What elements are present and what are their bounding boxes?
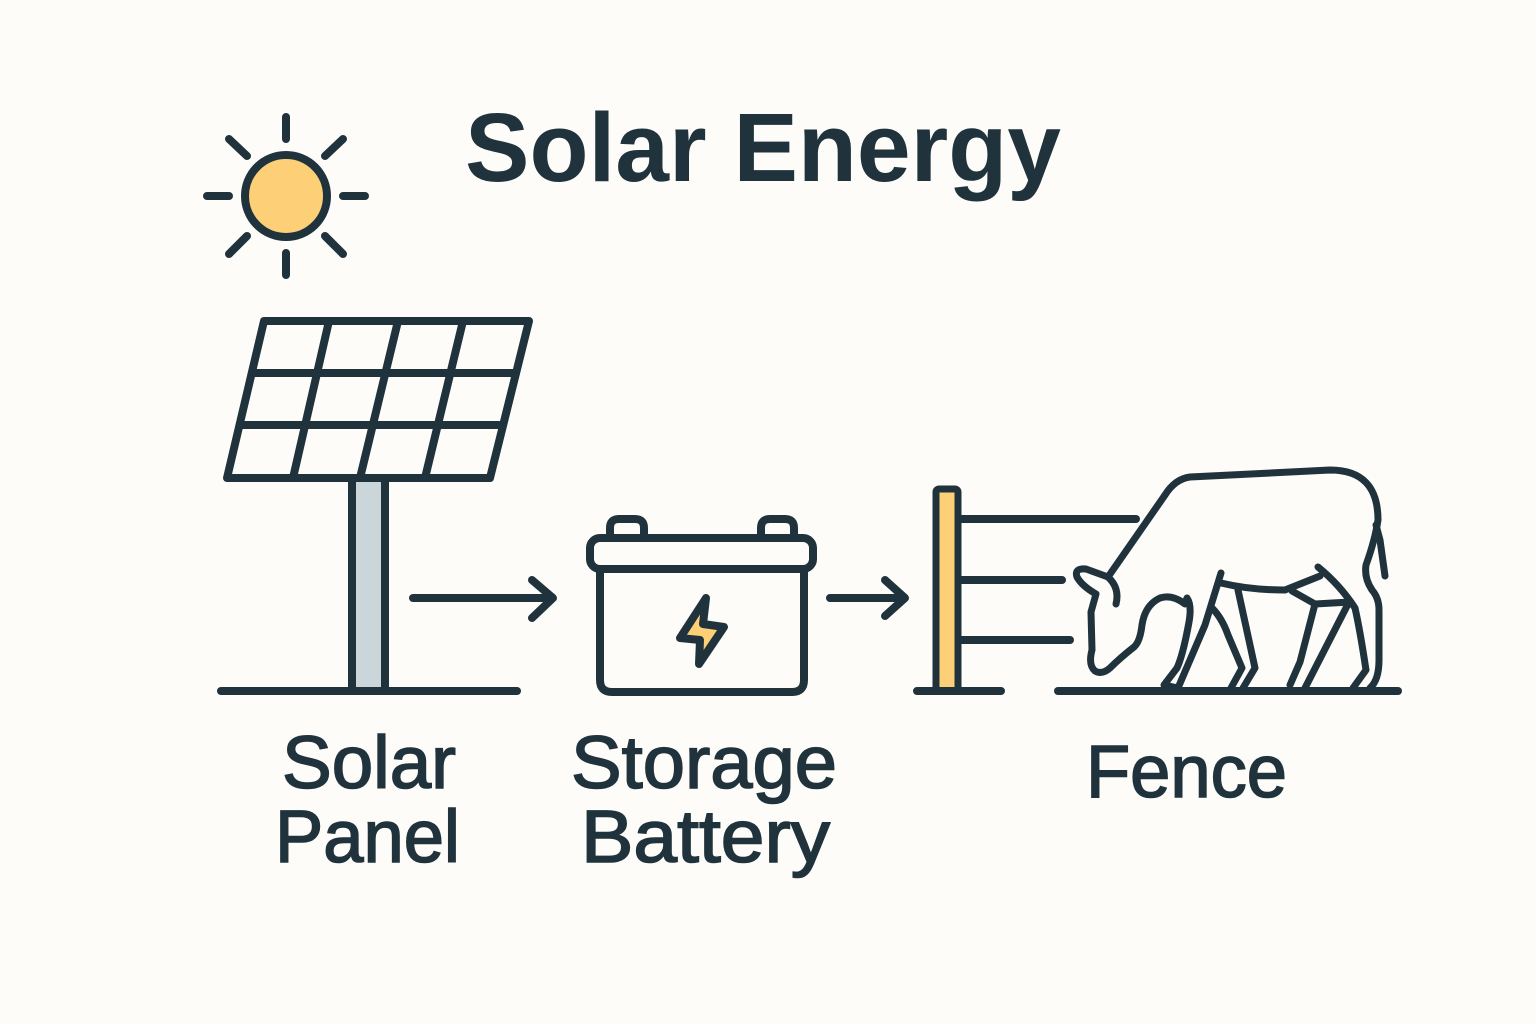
icon: solar panel [221,321,529,691]
title: Solar Energy [465,93,1061,202]
label: storage battery: Storage [571,721,837,804]
icon: electric fence [917,489,1136,691]
arrow: panel to battery [413,580,553,618]
label: fence: Fence [1086,730,1287,813]
label: storage battery [571,721,837,878]
icon: grazing animal [1058,470,1398,691]
label: storage battery: Battery [581,795,830,878]
label: solar panel [275,721,460,878]
label: solar panel: Panel [275,795,460,878]
icon: sun [207,117,365,275]
label: solar panel: Solar [282,721,456,804]
icon: storage battery [590,519,813,692]
arrow: battery to fence [830,580,905,616]
